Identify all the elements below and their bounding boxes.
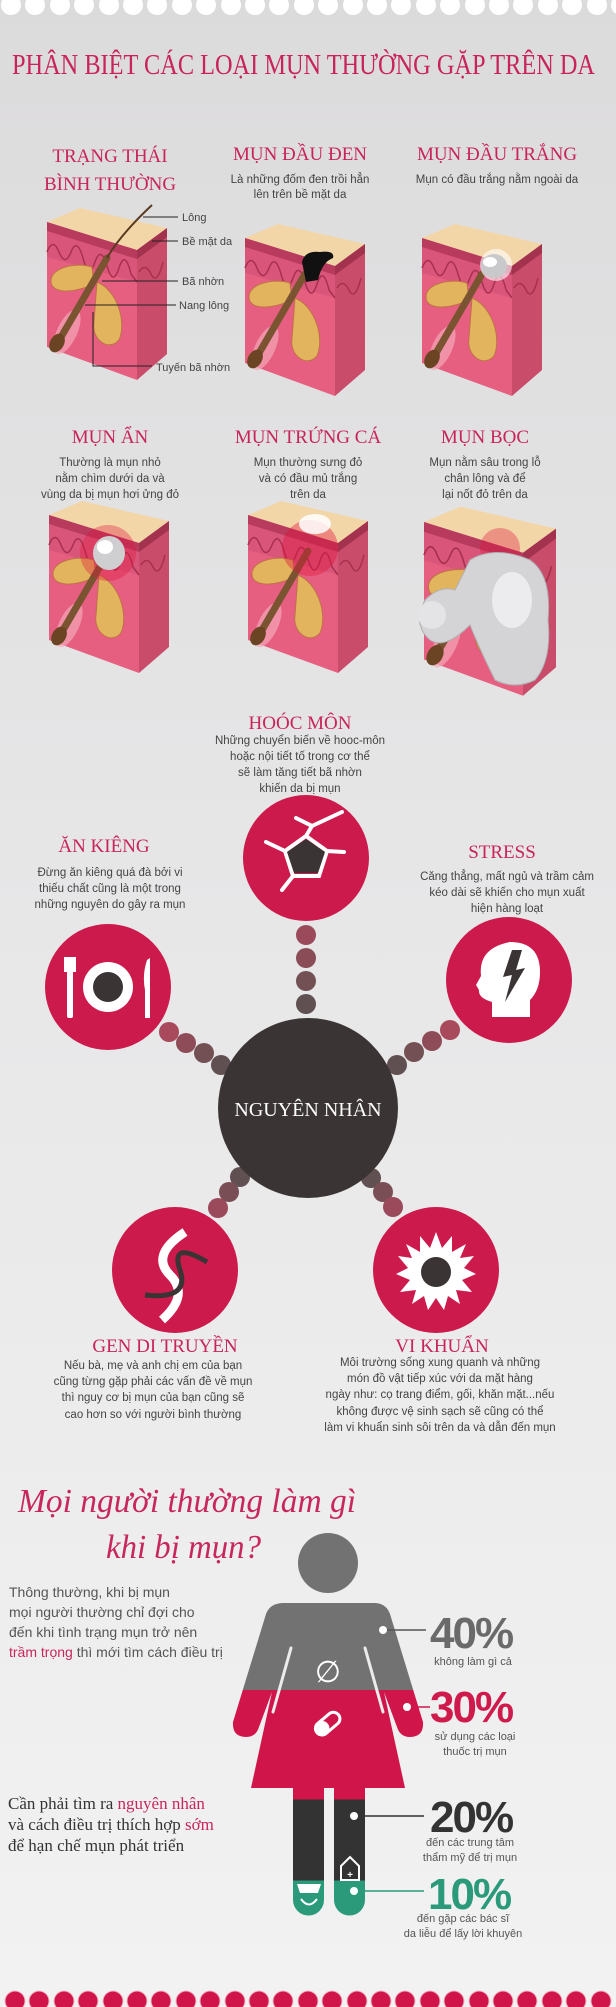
center: NGUYÊN NHÂN: NGUYÊN NHÂN <box>234 1098 382 1121</box>
stat: 10%: đến gặp các bác sĩ <box>417 1913 510 1925</box>
panel: normal skin: Lông <box>182 212 206 224</box>
stat: 20% <box>350 1793 517 1864</box>
cause: bacteria <box>324 1207 556 1434</box>
panel: acne: MỤN TRỨNG CÁ <box>235 426 381 448</box>
panel: normal skin: TRẠNG THÁI <box>52 145 168 167</box>
cause: hormone: khiến da bị mụn <box>259 783 341 795</box>
text block: advice: và cách điều trị thích hợp sớm <box>8 1815 214 1834</box>
stat: 40%: không làm gì cả <box>434 1656 513 1668</box>
panel: whitehead <box>416 143 579 396</box>
cause: hormone <box>215 712 385 921</box>
panel: blackhead: lên trên bề mặt da <box>254 189 347 201</box>
cause: bacteria: làm vi khuẩn sinh sôi trên da và dẫn đến mụn <box>324 1421 556 1434</box>
text block: usually <box>9 1584 223 1660</box>
panel: blackhead: MỤN ĐẦU ĐEN <box>233 143 367 165</box>
cause: diet: ĂN KIÊNG <box>58 835 150 857</box>
chart: woman figure: + <box>347 1870 353 1881</box>
panel: blackhead <box>231 143 369 396</box>
text block: usually: trầm trọng thì mới tìm cách điều trị <box>9 1644 223 1660</box>
panel: normal skin: Nang lông <box>179 300 229 312</box>
panel: normal skin: Tuyến bã nhờn <box>156 362 230 374</box>
panel: cyst: MỤN BỌC <box>441 427 529 448</box>
cause: bacteria: VI KHUẨN <box>395 1335 489 1357</box>
stat: 20%: đến các trung tâm <box>426 1837 514 1849</box>
panel: cyst: lại nốt đỏ trên da <box>442 489 528 501</box>
cause: diet: thiếu chất cũng là một trong <box>39 883 181 895</box>
stat: 10%: 10% <box>428 1870 511 1919</box>
cause: stress: hiện hàng loạt <box>471 903 544 915</box>
panel: whitehead: Mụn có đầu trắng nằm ngoài da <box>416 173 579 186</box>
stat: 30% <box>403 1683 515 1758</box>
cause: bacteria: món đồ vật tiếp xúc với da mặt hàng <box>347 1373 533 1385</box>
panel: acne: Mụn thường sưng đỏ <box>254 457 362 469</box>
cause: bacteria: Môi trường sống xung quanh và những <box>340 1357 540 1369</box>
heading: what people do: khi bị mụn? <box>106 1529 261 1566</box>
cause: genetics: cao hơn so với người bình thường <box>65 1409 241 1421</box>
panel: cyst <box>418 427 556 696</box>
panel: acne <box>235 426 381 673</box>
stat: 20%: thẩm mỹ để trị mụn <box>423 1852 517 1864</box>
center: NGUYÊN NHÂN <box>218 1018 398 1198</box>
panel: normal skin: Bã nhờn <box>182 276 224 288</box>
cause: stress: Căng thẳng, mất ngủ và trầm cảm <box>420 870 594 883</box>
heading: what people do <box>17 1483 356 1566</box>
connector dots <box>159 925 460 1218</box>
cause: hormone: Những chuyển biến về hooc-môn <box>215 735 385 747</box>
cause: genetics: GEN DI TRUYỀN <box>92 1335 238 1357</box>
stat: 10%: da liễu để lấy lời khuyên <box>404 1927 522 1940</box>
panel: hidden pimple <box>41 426 179 673</box>
panel: cyst: Mụn nằm sâu trong lỗ <box>429 456 541 469</box>
cause: genetics: cũng từng gặp phải các vấn đề về mụn <box>54 1376 252 1388</box>
text block: usually: đến khi tình trạng mụn trở nên <box>9 1624 197 1640</box>
cause: stress: kéo dài sẽ khiến cho mụn xuất <box>429 887 585 899</box>
cause: hormone: HOÓC MÔN <box>249 712 352 734</box>
cause: genetics <box>54 1207 252 1421</box>
stat: 20%: 20% <box>430 1793 513 1842</box>
stat: 30%: thuốc trị mụn <box>443 1746 507 1758</box>
cause: hormone: sẽ làm tăng tiết bã nhờn <box>238 767 362 779</box>
stat: 40%: 40% <box>430 1609 513 1658</box>
chart: woman figure <box>233 1533 423 1916</box>
stat: 10% <box>350 1870 522 1940</box>
panel: hidden pimple: MỤN ẨN <box>72 426 149 448</box>
cause: hormone: hoặc nội tiết tố trong cơ thể <box>230 751 370 763</box>
panel: normal skin: BÌNH THƯỜNG <box>44 173 176 195</box>
panel: acne: và có đầu mủ trắng <box>259 472 357 485</box>
stat: 30%: sử dụng các loại <box>435 1731 515 1743</box>
text block: advice: để hạn chế mụn phát triển <box>8 1836 185 1855</box>
text block: advice <box>8 1794 214 1855</box>
panel: hidden pimple: vùng da bị mụn hơi ửng đỏ <box>41 489 179 501</box>
cause: diet <box>35 835 185 1050</box>
cause: diet: những nguyên do gây ra mụn <box>35 899 185 911</box>
cause: stress: STRESS <box>468 842 536 863</box>
cause: stress <box>420 842 594 1043</box>
cause: bacteria: không được vệ sinh sạch sẽ cũng có thể <box>336 1406 544 1418</box>
cause: genetics: Nếu bà, mẹ và anh chị em của bạn <box>64 1360 242 1372</box>
stat: 30%: 30% <box>430 1683 513 1732</box>
panel: hidden pimple: nằm chìm dưới da và <box>55 472 165 485</box>
panel: acne: trên da <box>290 489 327 501</box>
text block: advice: Cần phải tìm ra nguyên nhân <box>8 1794 205 1813</box>
stat: 40% <box>379 1609 513 1668</box>
cause: bacteria: ngày như: cọ trang điểm, gối, khăn mặt...nếu <box>326 1389 554 1401</box>
chart: woman figure: ∅ <box>315 1655 341 1690</box>
decorative bottom dots <box>5 1991 611 2007</box>
panel: normal skin: Bề mặt da <box>182 236 233 248</box>
heading: what people do: Mọi người thường làm gì <box>17 1483 356 1520</box>
cause: diet: Đừng ăn kiêng quá đà bởi vi <box>37 867 183 879</box>
panel: normal skin <box>44 145 233 380</box>
panel: blackhead: Là những đốm đen trồi hẳn <box>231 173 369 186</box>
panel: whitehead: MỤN ĐẦU TRẮNG <box>417 143 577 165</box>
panel: cyst: chân lông và để <box>444 473 526 485</box>
text block: usually: Thông thường, khi bị mụn <box>9 1584 170 1600</box>
cause: genetics: thì nguy cơ bị mụn của bạn cũng sẽ <box>62 1392 244 1404</box>
panel: hidden pimple: Thường là mụn nhỏ <box>59 457 161 469</box>
text block: usually: mọi người thường chỉ đợi cho <box>9 1604 195 1620</box>
decorative top dots <box>1 0 616 15</box>
